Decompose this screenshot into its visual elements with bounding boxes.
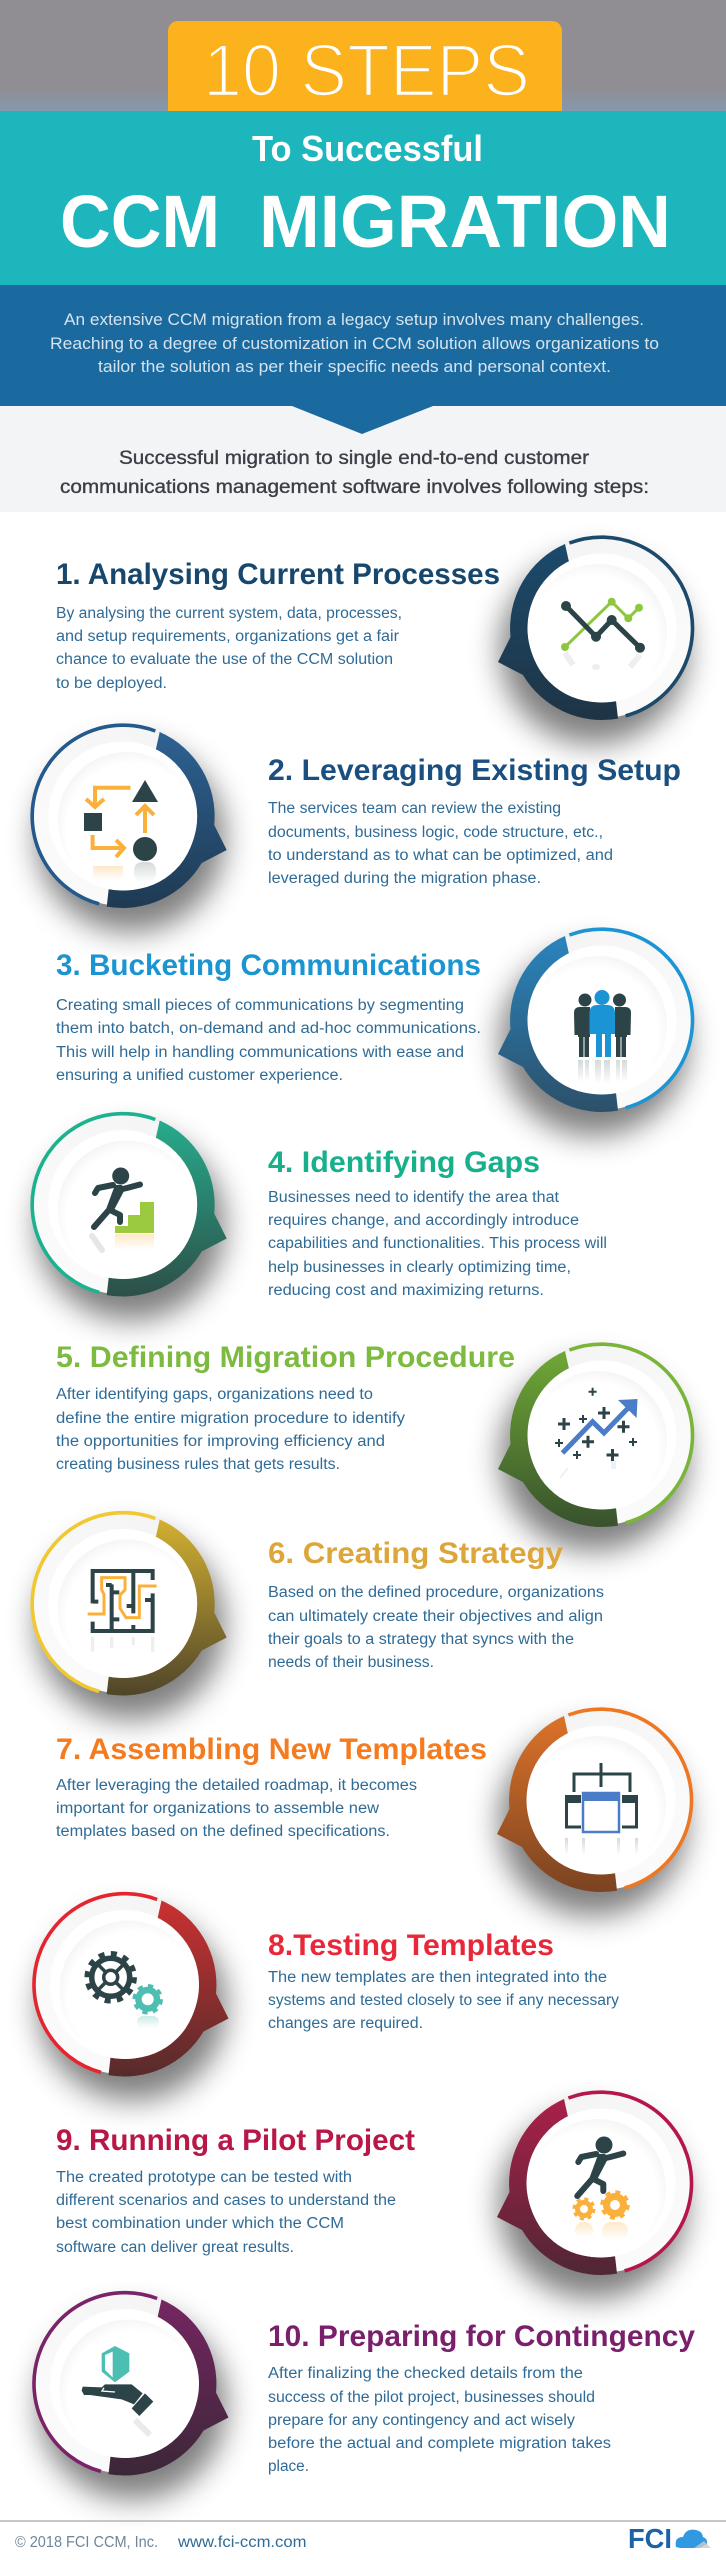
step 7 text: templates based on the defined specifications.: [56, 1823, 390, 1840]
icon: gears: [87, 1954, 161, 2028]
step 7 text: [56, 1777, 417, 1840]
step 4 text: [268, 1189, 607, 1299]
step 9 text: best combination under which the CCM: [56, 2215, 344, 2232]
step 7 heading: 7. Assembling New Templates: [56, 1733, 487, 1766]
step 4 text: requires change, and accordingly introduce: [268, 1212, 579, 1229]
step 8 text: [268, 1969, 619, 2032]
step 4 text: reducing cost and maximizing returns.: [268, 1282, 544, 1299]
step 2 text: The services team can review the existing: [268, 800, 561, 817]
step 10 heading: 10. Preparing for Contingency: [268, 2320, 695, 2353]
step 3 text: ensuring a unified customer experience.: [56, 1067, 343, 1084]
icon: template hierarchy: [565, 1763, 638, 1855]
icon: line chart: [561, 598, 645, 670]
step 10 text: [268, 2365, 611, 2475]
title band: To Successful CCM Migration: [0, 111, 726, 285]
step 2 text: leveraged during the migration phase.: [268, 870, 541, 887]
logo: FCI cloud: FCI: [628, 2523, 672, 2554]
icon: runner on gears: [574, 2136, 628, 2240]
step 3 text: This will help in handling communications with ease and: [56, 1044, 464, 1061]
icon: maze: [88, 1571, 157, 1652]
step 10 badge: [34, 2293, 228, 2500]
step 9 text: [56, 2169, 396, 2256]
header band: grey top: [0, 0, 726, 111]
icon: person climbing stairs: [92, 1168, 154, 1250]
step 7 badge: [497, 1709, 692, 1916]
intro panel: Reaching to a degree of customization in CCM solution allows organizations to: [50, 334, 659, 353]
step 6 text: can ultimately create their objectives and align: [268, 1608, 603, 1625]
step 10 text: prepare for any contingency and act wisely: [268, 2412, 575, 2429]
step 6 text: Based on the defined procedure, organizations: [268, 1584, 604, 1601]
step 8 text: changes are required.: [268, 2015, 423, 2032]
step 9 text: The created prototype can be tested with: [56, 2169, 352, 2186]
step 3 heading: 3. Bucketing Communications: [56, 949, 481, 982]
intro panel: An extensive CCM migration from a legacy setup involves many challenges.: [64, 310, 644, 329]
step 6 text: needs of their business.: [268, 1654, 434, 1671]
step 6 text: [268, 1584, 604, 1671]
step 8 heading: 8.Testing Templates: [268, 1929, 554, 1962]
step 10 text: place.: [268, 2458, 309, 2475]
icon: team of people: [574, 990, 631, 1084]
step 4: [32, 1114, 607, 1320]
step 9 text: different scenarios and cases to understand the: [56, 2192, 396, 2209]
website: www.fci-ccm.com: [177, 2534, 306, 2551]
step 5 text: creating business rules that gets results.: [56, 1456, 340, 1473]
title band: To Successful CCM Migration: MIGRATION: [259, 180, 671, 263]
step 1 badge: [498, 537, 693, 744]
title band: To Successful CCM Migration: CCM: [60, 180, 220, 263]
step 5 heading: 5. Defining Migration Procedure: [56, 1341, 515, 1374]
icon: rising arrow with plus signs: [555, 1388, 638, 1478]
step 2 heading: 2. Leveraging Existing Setup: [268, 754, 681, 787]
intro panel: tailor the solution as per their specific needs and personal context.: [98, 357, 611, 376]
step 7 text: important for organizations to assemble new: [56, 1800, 380, 1817]
step 4 heading: 4. Identifying Gaps: [268, 1146, 540, 1179]
copyright: © 2018 FCI CCM, Inc.: [15, 2534, 158, 2551]
step 6 heading: 6. Creating Strategy: [268, 1537, 563, 1570]
step 3 badge: [498, 929, 693, 1136]
step 7: [56, 1709, 692, 1916]
step 8 text: The new templates are then integrated into the: [268, 1969, 607, 1986]
step 1 text: By analysing the current system, data, processes,: [56, 605, 402, 622]
step 5: [56, 1341, 693, 1551]
step 5 text: define the entire migration procedure to identify: [56, 1410, 405, 1427]
step 1 text: to be deployed.: [56, 675, 167, 692]
step 5 badge: [498, 1344, 693, 1551]
step 5 text: the opportunities for improving efficiency and: [56, 1433, 385, 1450]
step 3 text: [56, 997, 481, 1084]
title tab: 10 Steps: 10 STEPS: [203, 29, 530, 112]
footer: [0, 2520, 726, 2554]
step 1 text: chance to evaluate the use of the CCM solution: [56, 651, 393, 668]
step 2 text: [268, 800, 613, 887]
step 9 badge: [497, 2092, 692, 2299]
step 2 text: to understand as to what can be optimized, and: [268, 847, 613, 864]
step 8 text: systems and tested closely to see if any necessary: [268, 1992, 619, 2009]
step 8: [34, 1894, 619, 2100]
logo: FCI cloud: [628, 2523, 711, 2554]
arrow pointing down from intro panel: [292, 406, 433, 434]
step 2 text: documents, business logic, code structure, etc.,: [268, 824, 603, 841]
subheading panel: Successful migration to single end-to-end customer: [119, 448, 590, 469]
step 6 text: their goals to a strategy that syncs with the: [268, 1631, 574, 1648]
title band: To Successful CCM Migration: To Successful: [252, 128, 483, 169]
step 2 badge: [32, 725, 227, 932]
step 10: [34, 2293, 695, 2500]
step 10 text: before the actual and complete migration takes: [268, 2435, 611, 2452]
step 10 text: After finalizing the checked details from the: [268, 2365, 583, 2382]
step 4 badge: [32, 1114, 227, 1320]
subheading panel: [0, 406, 726, 512]
step 2: [32, 725, 681, 932]
step 1 text: and setup requirements, organizations get a fair: [56, 628, 399, 645]
subheading panel: communications management software involves following steps:: [60, 477, 649, 498]
step 5 text: [56, 1386, 405, 1473]
step 4 text: help businesses in clearly optimizing time,: [268, 1259, 571, 1276]
step 8 badge: [34, 1894, 228, 2100]
step 4 text: Businesses need to identify the area that: [268, 1189, 560, 1206]
step 10 text: success of the pilot project, businesses should: [268, 2389, 595, 2406]
step 6 badge: [32, 1513, 227, 1720]
step 9 text: software can deliver great results.: [56, 2239, 294, 2256]
step 5 text: After identifying gaps, organizations need to: [56, 1386, 373, 1403]
icon: hand holding shield: [82, 2346, 153, 2435]
icon: process shapes with arrows: [84, 780, 158, 882]
step 1 heading: 1. Analysing Current Processes: [56, 558, 500, 591]
step 3 text: Creating small pieces of communications by segmenting: [56, 997, 464, 1014]
step 4 text: capabilities and functionalities. This process will: [268, 1235, 607, 1252]
step 6: [32, 1513, 604, 1720]
intro panel: [0, 285, 726, 406]
step 3: [56, 929, 693, 1136]
step 9 heading: 9. Running a Pilot Project: [56, 2124, 415, 2157]
step 1: [56, 537, 693, 744]
step 1 text: [56, 605, 402, 692]
step 7 text: After leveraging the detailed roadmap, it becomes: [56, 1777, 417, 1794]
step 3 text: them into batch, on-demand and ad-hoc communications.: [56, 1020, 481, 1037]
step 9: [56, 2092, 692, 2299]
